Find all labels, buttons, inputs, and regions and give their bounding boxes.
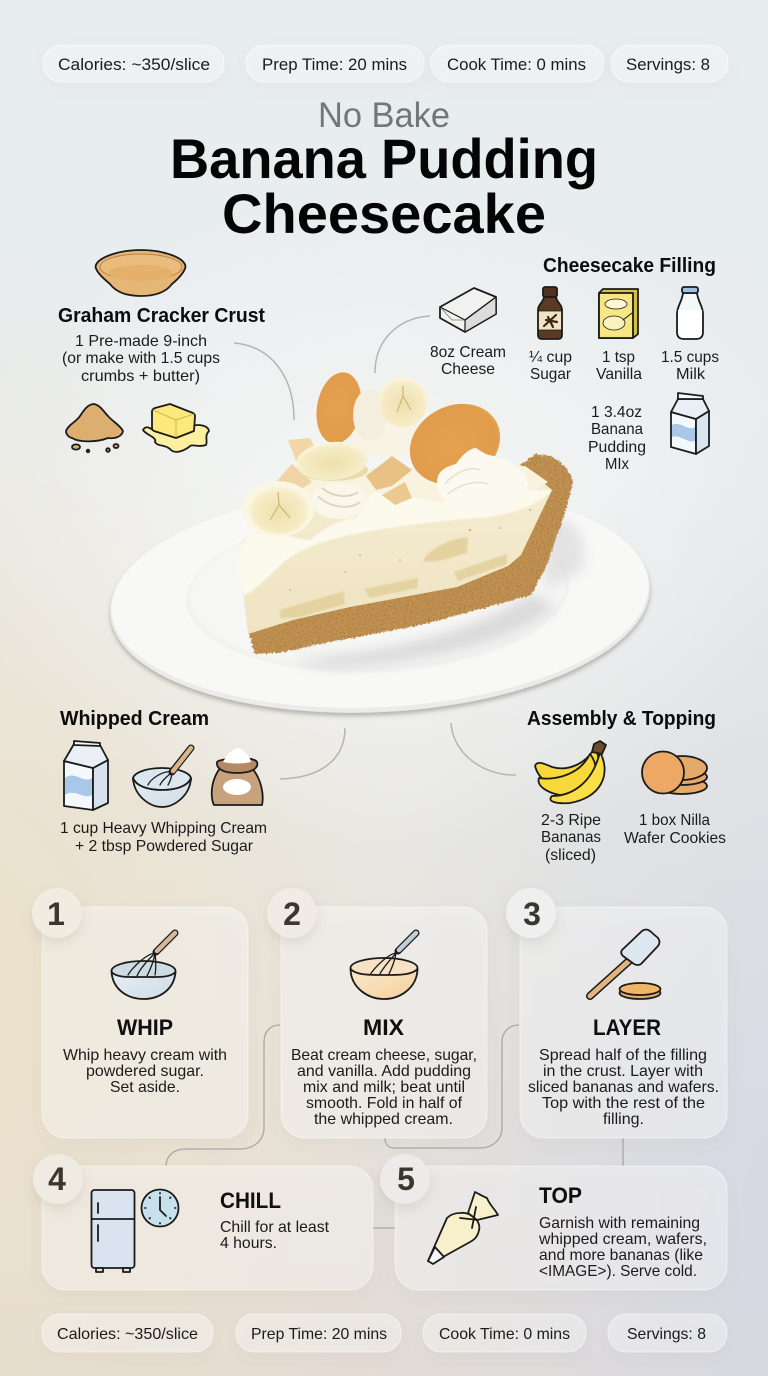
text: chill: Chill for at least	[220, 1219, 330, 1236]
text: crust amounts: 1 Pre-made 9-inch	[75, 333, 207, 350]
text: banana pudding mix: Pudding	[588, 439, 646, 456]
text: layer: filling.	[603, 1111, 644, 1128]
arrow: crust to slice	[234, 343, 294, 420]
heading: filling: Cheesecake Filling	[543, 254, 716, 277]
icon: cream cheese	[440, 288, 496, 332]
icon: mixing bowl	[350, 933, 418, 999]
pill: servings	[611, 45, 728, 82]
text: bananas: 2-3 Ripe	[541, 812, 601, 829]
number badge 3	[506, 888, 556, 938]
slice: crust	[248, 454, 573, 654]
pill: calories	[43, 45, 224, 82]
pill: servings: Servings: 8	[627, 1326, 706, 1343]
icon: pie crust	[96, 250, 186, 296]
number badge 1	[32, 888, 82, 938]
text: top: and more bananas (like	[539, 1247, 703, 1264]
panel: assembly and topping	[527, 707, 726, 864]
panel: step 5 top	[380, 1154, 727, 1290]
slice: top surface	[298, 466, 548, 520]
text: mix: Beat cream cheese, sugar,	[291, 1047, 477, 1064]
icon: cream carton	[64, 741, 108, 810]
top stats pills	[43, 45, 728, 82]
text: milk: 1.5 cups	[661, 349, 719, 366]
title: No Bake	[318, 96, 450, 135]
slice: whipped swirl back	[349, 407, 421, 459]
text: cream cheese: 8oz Cream	[430, 344, 506, 361]
text: layer	[528, 1047, 719, 1128]
icon: powdered sugar sack	[212, 748, 263, 805]
pill: prep time	[236, 1314, 401, 1352]
arrow: whipped cream to slice	[280, 728, 345, 779]
text: banana pudding mix: 1 3.4oz	[591, 404, 642, 421]
icon: whisk in bowl	[112, 933, 176, 999]
text: milk: Milk	[676, 366, 706, 383]
text: mix: smooth. Fold in half of	[306, 1095, 463, 1112]
text: mix: the whipped cream.	[314, 1111, 453, 1128]
icon: wafer cookies	[642, 752, 707, 794]
bottom stats pills	[42, 1314, 727, 1352]
topping: large wafer	[396, 388, 514, 500]
number badge 4: 4	[48, 1161, 66, 1197]
panel: graham cracker crust	[58, 250, 265, 452]
text: layer: in the crust. Layer with	[543, 1063, 703, 1080]
pill: cook time: Cook Time: 0 mins	[439, 1326, 570, 1343]
text: whipped cream amounts: 1 cup Heavy Whipping Cream	[60, 820, 267, 837]
text: layer: Spread half of the filling	[539, 1047, 707, 1064]
text: whip: Set aside.	[110, 1079, 180, 1096]
text: wafers: Wafer Cookies	[624, 830, 726, 847]
text: whip: powdered sugar.	[86, 1063, 204, 1080]
heading: layer: LAYER	[593, 1015, 661, 1040]
slice: filling	[239, 467, 552, 634]
icon: refrigerator	[92, 1190, 134, 1272]
panel: step 3 layer	[506, 888, 727, 1138]
icon: clock	[142, 1190, 178, 1226]
arrow: step 4 to step 5	[373, 1227, 395, 1229]
text: milk	[661, 349, 719, 383]
topping: whipped dollop	[437, 448, 528, 510]
heading: whip: WHIP	[117, 1015, 173, 1040]
slice: banana layers	[280, 537, 507, 618]
icon: bowl and whisk	[133, 748, 191, 807]
number badge 1: 1	[47, 896, 65, 932]
text: top	[538, 1215, 707, 1280]
heading: chill: CHILL	[220, 1188, 281, 1213]
panel: whipped cream	[60, 707, 267, 855]
pill: cook time	[423, 1314, 586, 1352]
text: whip: Whip heavy cream with	[63, 1047, 227, 1064]
text: layer: Top with the rest of the	[542, 1095, 705, 1112]
pill: calories: Calories: ~350/slice	[58, 55, 210, 74]
text: bananas	[541, 812, 601, 864]
text: banana pudding mix: Banana	[591, 421, 643, 438]
text: top: whipped cream, wafers,	[538, 1231, 707, 1248]
number badge 5: 5	[397, 1161, 415, 1197]
heading: mix: MIX	[363, 1015, 404, 1040]
pill: prep time: Prep Time: 20 mins	[262, 55, 407, 74]
icon: spatula and wafer	[590, 930, 660, 999]
pill: prep time	[246, 45, 424, 82]
text: whip	[63, 1047, 227, 1096]
topping: standing wafer	[311, 369, 367, 447]
text: sugar	[529, 349, 572, 383]
text: bananas: (sliced)	[545, 847, 596, 864]
text: mix	[291, 1047, 477, 1128]
title: Banana Pudding	[170, 127, 598, 190]
pill: cook time: Cook Time: 0 mins	[447, 55, 586, 74]
arrow: step 3 to step 5	[622, 1138, 624, 1166]
icon: yellow box	[599, 289, 638, 338]
text: vanilla	[596, 349, 642, 383]
pill: cook time	[431, 45, 604, 82]
slice: whipped band	[239, 490, 552, 595]
text: crust amounts: crumbs + butter)	[81, 368, 200, 385]
number badge 4	[33, 1154, 83, 1204]
icon: crumbs	[66, 404, 123, 452]
text: sugar: Sugar	[530, 366, 572, 383]
text: cream cheese	[430, 344, 506, 378]
text: crust amounts: (or make with 1.5 cups	[62, 350, 220, 367]
arrow: step 1-2 to step 4	[166, 1025, 280, 1166]
heading: whipped cream: Whipped Cream	[60, 707, 209, 730]
text: vanilla: 1 tsp	[602, 349, 635, 366]
panel: cheesecake filling	[430, 254, 719, 473]
text: top: Garnish with remaining	[539, 1215, 700, 1232]
icon: butter	[143, 404, 209, 452]
arrow: step 2-3 connector	[385, 1025, 519, 1148]
title	[170, 96, 598, 245]
icon: milk bottle	[677, 287, 703, 339]
pill: servings: Servings: 8	[626, 55, 710, 74]
panel: step 2 mix	[267, 888, 487, 1138]
number badge 2	[267, 888, 317, 938]
topping: banana slice top	[378, 377, 428, 427]
text: chill	[220, 1219, 330, 1252]
icon: bananas	[535, 741, 606, 803]
topping: flat banana slice	[294, 439, 370, 483]
number badge 2: 2	[283, 896, 301, 932]
text: layer: sliced bananas and wafers.	[528, 1079, 719, 1096]
text: whipped cream amounts: + 2 tbsp Powdered Sugar	[75, 838, 254, 855]
plate and cheesecake slice image	[105, 369, 655, 726]
plate	[105, 473, 655, 726]
text: cream cheese: Cheese	[441, 361, 495, 378]
icon: piping bag	[428, 1192, 498, 1264]
pill: servings	[608, 1314, 727, 1352]
text: chill: 4 hours.	[220, 1235, 277, 1252]
text: vanilla: Vanilla	[596, 366, 642, 383]
text: banana pudding mix	[588, 404, 646, 473]
text: wafers	[624, 812, 726, 847]
text: mix: mix and milk; beat until	[303, 1079, 465, 1096]
title: Cheesecake	[222, 182, 546, 245]
number badge 5	[380, 1154, 430, 1204]
text: crust amounts	[62, 333, 220, 385]
text: mix: and vanilla. Add pudding	[297, 1063, 471, 1080]
text: banana pudding mix: MIx	[605, 456, 629, 473]
pill: calories	[42, 1314, 213, 1352]
heading: top: TOP	[539, 1183, 582, 1208]
pill: prep time: Prep Time: 20 mins	[251, 1326, 387, 1343]
panel: step 4 chill	[33, 1154, 373, 1290]
text: sugar: ¼ cup	[529, 349, 572, 366]
panel: step 1 whip	[32, 888, 248, 1138]
topping: left banana slice	[242, 481, 314, 537]
text: bananas: Bananas	[541, 829, 601, 846]
heading: assembly: Assembly & Topping	[527, 707, 716, 730]
number badge 3: 3	[523, 896, 541, 932]
text: top: <IMAGE>). Serve cold.	[539, 1263, 697, 1280]
slice: vanilla specks	[289, 509, 531, 591]
text: whipped cream amounts	[60, 820, 267, 855]
topping: wafer pieces	[276, 438, 412, 505]
topping: banana slice back	[353, 389, 387, 441]
pill: calories: Calories: ~350/slice	[57, 1326, 198, 1343]
text: wafers: 1 box Nilla	[639, 812, 710, 829]
arrow: cream cheese to slice	[375, 316, 430, 373]
arrow: assembly to slice	[451, 723, 516, 775]
heading: crust: Graham Cracker Crust	[58, 304, 265, 327]
icon: vanilla bottle	[538, 287, 562, 339]
icon: pudding carton	[671, 393, 709, 454]
slice: whipped swirl front	[311, 483, 367, 519]
